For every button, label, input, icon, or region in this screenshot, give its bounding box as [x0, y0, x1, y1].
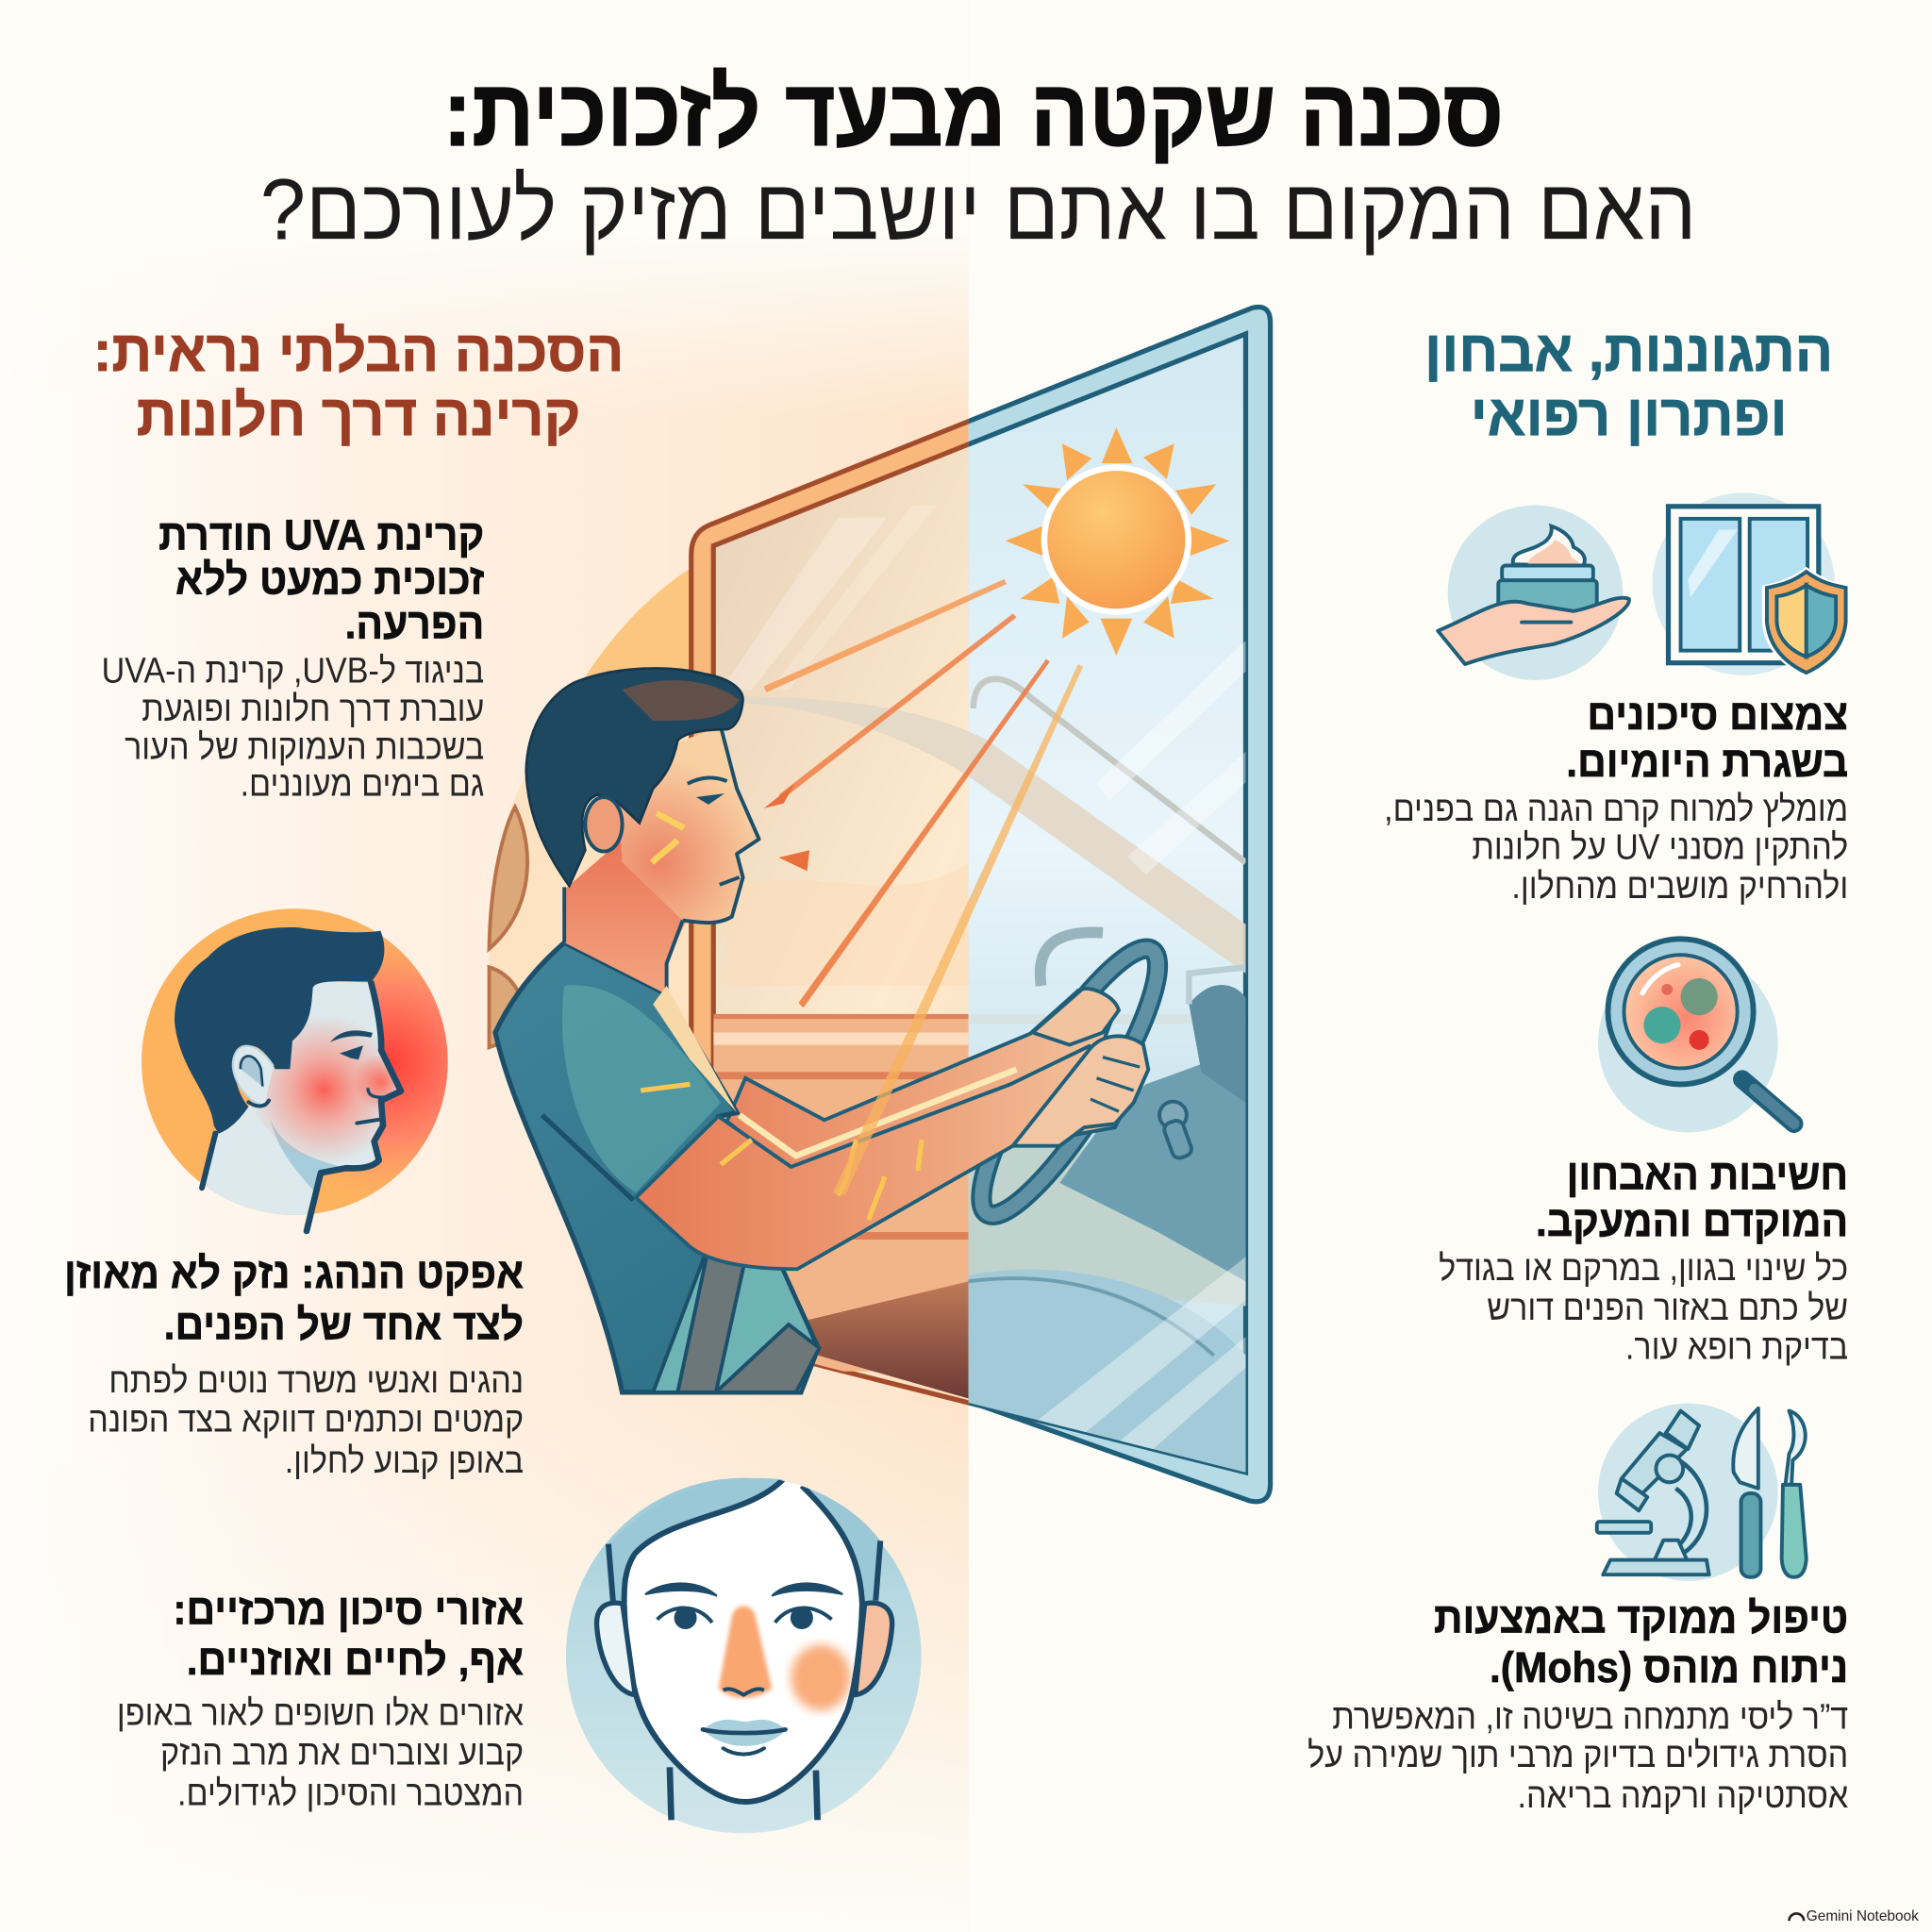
- torso and shirt: [495, 942, 818, 1392]
- face: [616, 727, 759, 923]
- block: UVA radiation: גם בימים מעוננים.: [241, 763, 484, 804]
- eye and brow: [688, 777, 727, 784]
- icon: magnifier over skin: [1598, 939, 1794, 1132]
- block: Mohs surgery: ניתוח מוהס (Mohs).: [1490, 1643, 1848, 1691]
- icon: profile head with red glow: [142, 908, 453, 1231]
- steering wheel: [956, 930, 1183, 1233]
- block: reduce risks: בשגרת היומיום.: [1566, 738, 1848, 786]
- block: Mohs surgery: אסתטיקה ורקמה בריאה.: [1518, 1774, 1849, 1815]
- mirror: [1041, 932, 1103, 986]
- block: early diagnosis: [1439, 1151, 1848, 1367]
- block: driver effect: באופן קבוע לחלון.: [285, 1440, 524, 1480]
- title: [260, 60, 1696, 258]
- block: early diagnosis: בדיקת רופא עור.: [1625, 1326, 1848, 1367]
- car interior through window: [713, 506, 1245, 1473]
- heading: invisible danger: קרינה דרך חלונות: [137, 382, 580, 447]
- block: reduce risks: צמצום סיכונים: [1587, 691, 1848, 740]
- near hand: [1013, 1036, 1148, 1146]
- hair: [526, 668, 743, 886]
- neck: [564, 823, 688, 994]
- block: UVA radiation: בשכבות העמוקות של העור: [125, 726, 484, 767]
- block: key risk areas: קבוע וצוברים את מרב הנזק: [160, 1732, 524, 1773]
- icon: hand with sunscreen jar: [1438, 506, 1629, 680]
- orange backdrop behind driver: [489, 564, 696, 1047]
- dashboard: [1059, 1059, 1245, 1281]
- heading: invisible danger: הסכנה הבלתי נראית:: [93, 318, 624, 383]
- far hand: [1033, 989, 1119, 1045]
- window frame: [691, 307, 1271, 1502]
- block: Mohs surgery: טיפול ממוקד באמצעות: [1434, 1594, 1848, 1642]
- block: key risk areas: המצטבר והסיכון לגידולים.: [177, 1773, 524, 1813]
- block: key risk areas: אזורי סיכון מרכזיים:: [173, 1586, 524, 1634]
- icon: sun: [1006, 427, 1230, 656]
- block: key risk areas: [117, 1586, 524, 1813]
- block: UVA radiation: הפרעה.: [345, 600, 484, 648]
- driver: [495, 668, 1183, 1392]
- block: UVA radiation: [102, 511, 484, 804]
- block: reduce risks: להתקין מסנני UV על חלונות: [1472, 826, 1848, 867]
- watermark: Gemini Notebook: [1807, 1908, 1919, 1924]
- block: Mohs surgery: ד”ר ליסי מתמחה בשיטה זו, המאפשרת: [1332, 1696, 1848, 1737]
- block: driver effect: לצד אחד של הפנים.: [164, 1301, 524, 1349]
- heading: protection: [1424, 318, 1833, 447]
- block: reduce risks: מומלץ למרוח קרם הגנה גם בפנים,: [1384, 788, 1848, 828]
- glass glare: [721, 518, 887, 690]
- block: key risk areas: אזורים אלו חשופים לאור באופן: [117, 1692, 524, 1733]
- heading: protection: התגוננות, אבחון: [1424, 318, 1833, 383]
- block: early diagnosis: המוקדם והמעקב.: [1536, 1198, 1848, 1245]
- heading: protection: ופתרון רפואי: [1471, 382, 1788, 447]
- title: סכנה שקטה מבעד לזכוכית:: [443, 60, 1504, 166]
- block: early diagnosis: חשיבות האבחון: [1567, 1151, 1848, 1199]
- icon: window with shield: [1653, 492, 1851, 677]
- ear: [585, 797, 623, 852]
- block: early diagnosis: כל שינוי בגוון, במרקם או בגודל: [1439, 1247, 1848, 1288]
- block: driver effect: אפקט הנהג: נזק לא מאוזן: [64, 1250, 524, 1297]
- block: UVA radiation: זכוכית כמעט ללא: [175, 556, 484, 604]
- seat belt: [677, 1242, 820, 1392]
- icon: front face with risk areas: [566, 1478, 922, 1833]
- block: reduce risks: [1384, 691, 1848, 907]
- block: early diagnosis: של כתם באזור הפנים דורש: [1487, 1287, 1848, 1327]
- heading: invisible danger: [93, 318, 624, 447]
- far arm: [727, 991, 1115, 1171]
- title: האם המקום בו אתם יושבים מזיק לעורכם?: [260, 160, 1696, 258]
- central illustration: driver at window: [489, 307, 1271, 1502]
- block: reduce risks: ולהרחיק מושבים מהחלון.: [1511, 865, 1848, 907]
- heat marks: [641, 1084, 922, 1220]
- block: Mohs surgery: הסרת גידולים בדיוק מרבי תוך שמירה על: [1307, 1734, 1848, 1774]
- block: Mohs surgery: [1307, 1594, 1849, 1815]
- icon: microscope and surgical tools: [1597, 1404, 1807, 1581]
- block: UVA radiation: בניגוד ל-UVB, קרינת ה-UVA: [102, 650, 484, 691]
- block: driver effect: נהגים ואנשי משרד נוטים לפתח: [108, 1359, 524, 1400]
- block: UVA radiation: קרינת UVA חודרת: [158, 511, 484, 559]
- block: driver effect: קמטים וכתמים דווקא בצד הפונה: [88, 1399, 524, 1440]
- block: UVA radiation: עוברת דרך חלונות ופוגעת: [142, 688, 484, 728]
- near arm: [636, 1046, 1140, 1269]
- arrows: UV rays: [764, 579, 1083, 1195]
- block: key risk areas: אף, לחיים ואוזניים.: [187, 1637, 524, 1684]
- window glass: [713, 334, 1245, 1473]
- block: driver effect: [64, 1250, 524, 1480]
